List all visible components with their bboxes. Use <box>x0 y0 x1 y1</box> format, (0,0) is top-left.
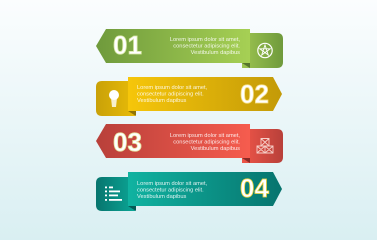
text block: step 03: Lorem ipsum dolor sit amet, <box>170 133 240 139</box>
text block: step 03: consectetur adipiscing elit. <box>173 140 240 146</box>
panel: step 04 <box>96 172 282 211</box>
panel: step 03 <box>96 124 283 163</box>
panel: step 01 <box>96 29 283 68</box>
text block: step 01: Vestibulum dapibus <box>191 50 240 56</box>
ribbon fold: step 04 <box>128 206 136 211</box>
ribbon fold: step 02 <box>128 111 136 116</box>
number: 01: 01 <box>113 30 142 60</box>
icon tab: step 02 <box>96 81 135 116</box>
text block: step 03: Vestibulum dapibus <box>191 146 240 152</box>
icon tab: step 04 <box>96 177 135 211</box>
text block: step 04: Vestibulum dapibus <box>137 194 186 200</box>
text block: step 02: consectetur adipiscing elit. <box>137 92 204 98</box>
text block: step 01: consectetur adipiscing elit. <box>173 44 240 50</box>
panel: step 02 <box>96 77 282 116</box>
number: 04: 04 <box>240 173 269 203</box>
text block: step 02: Vestibulum dapibus <box>137 98 186 104</box>
text block: step 04: consectetur adipiscing elit. <box>137 188 204 194</box>
ribbon: step 01 <box>96 29 250 63</box>
icon: list <box>105 186 122 201</box>
text block: step 04: Lorem ipsum dolor sit amet, <box>137 181 208 187</box>
number: 03: 03 <box>113 127 142 157</box>
ribbon: step 03 <box>96 124 250 158</box>
text block: step 02: Lorem ipsum dolor sit amet, <box>137 85 208 91</box>
icon tab: step 01 <box>242 33 283 68</box>
icon: wheel <box>258 43 272 58</box>
ribbon fold: step 01 <box>242 63 250 68</box>
text block: step 01: Lorem ipsum dolor sit amet, <box>170 37 240 43</box>
number: 02: 02 <box>240 79 269 109</box>
icon tab: step 03 <box>242 129 283 163</box>
icon: light bulb <box>109 90 119 107</box>
ribbon fold: step 03 <box>242 158 250 163</box>
icon: crates <box>257 138 273 153</box>
ribbon: step 02 <box>128 77 282 111</box>
ribbon: step 04 <box>128 172 282 206</box>
